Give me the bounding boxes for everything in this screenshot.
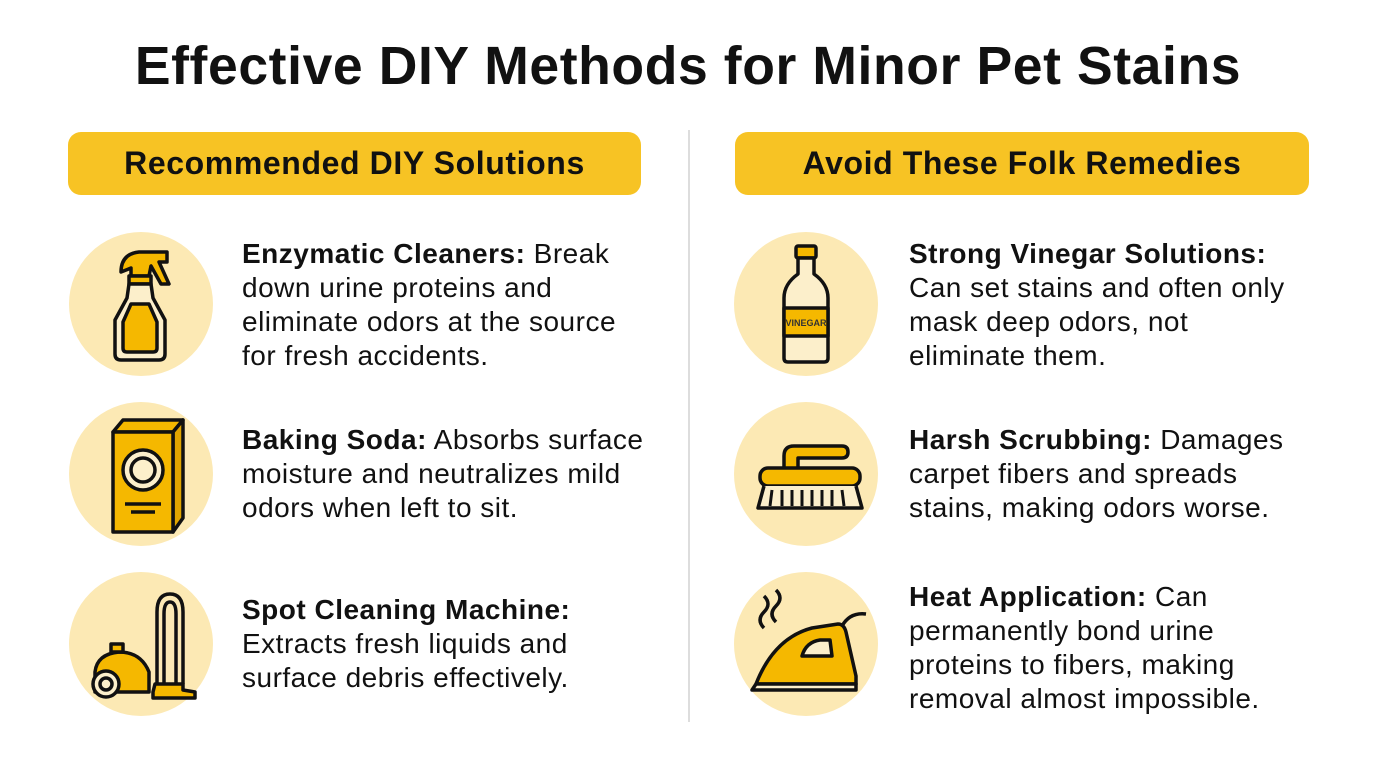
text: baking soda: Baking Soda: Absorbs surface xyxy=(242,424,643,455)
icon: vinegar bottle: VINEGAR xyxy=(785,318,827,328)
text: spot cleaning: surface debris effectively. xyxy=(242,662,569,693)
icon: steam iron xyxy=(734,572,878,716)
text: scrubbing: carpet fibers and spreads xyxy=(909,458,1237,489)
text: baking soda: odors when left to sit. xyxy=(242,492,518,523)
text: heat: Heat Application: Can xyxy=(909,581,1208,612)
text: vinegar: Strong Vinegar Solutions: xyxy=(909,238,1266,269)
text: spot cleaning xyxy=(242,594,570,693)
text: vinegar: Can set stains and often only xyxy=(909,272,1285,303)
banner: avoid: Avoid These Folk Remedies xyxy=(803,145,1241,181)
text: enzymatic: for fresh accidents. xyxy=(242,340,489,371)
text: scrubbing xyxy=(909,424,1284,523)
text: heat: permanently bond urine xyxy=(909,615,1214,646)
text: heat: proteins to fibers, making xyxy=(909,649,1235,680)
icon: vacuum xyxy=(69,572,213,716)
text: spot cleaning: Extracts fresh liquids and xyxy=(242,628,568,659)
text: baking soda xyxy=(242,424,643,523)
text: vinegar xyxy=(909,238,1285,371)
text: baking soda: moisture and neutralizes mild xyxy=(242,458,621,489)
text: scrubbing: stains, making odors worse. xyxy=(909,492,1270,523)
title: Effective DIY Methods for Minor Pet Stains xyxy=(135,37,1241,96)
icon: scrub brush xyxy=(734,402,878,546)
icon: vinegar bottle xyxy=(734,232,878,376)
banner: recommended xyxy=(68,132,641,195)
text: vinegar: eliminate them. xyxy=(909,340,1106,371)
text: enzymatic: down urine proteins and xyxy=(242,272,552,303)
icon: spray bottle xyxy=(69,232,213,376)
text: scrubbing: Harsh Scrubbing: Damages xyxy=(909,424,1284,455)
text: heat xyxy=(909,581,1260,714)
text: spot cleaning: Spot Cleaning Machine: xyxy=(242,594,570,625)
icon: baking soda box xyxy=(69,402,213,546)
text: enzymatic: eliminate odors at the source xyxy=(242,306,616,337)
text: vinegar: mask deep odors, not xyxy=(909,306,1188,337)
banner: recommended: Recommended DIY Solutions xyxy=(124,145,585,181)
text: enzymatic xyxy=(242,238,616,371)
text: enzymatic: Enzymatic Cleaners: Break xyxy=(242,238,609,269)
banner: avoid xyxy=(735,132,1309,195)
text: heat: removal almost impossible. xyxy=(909,683,1260,714)
